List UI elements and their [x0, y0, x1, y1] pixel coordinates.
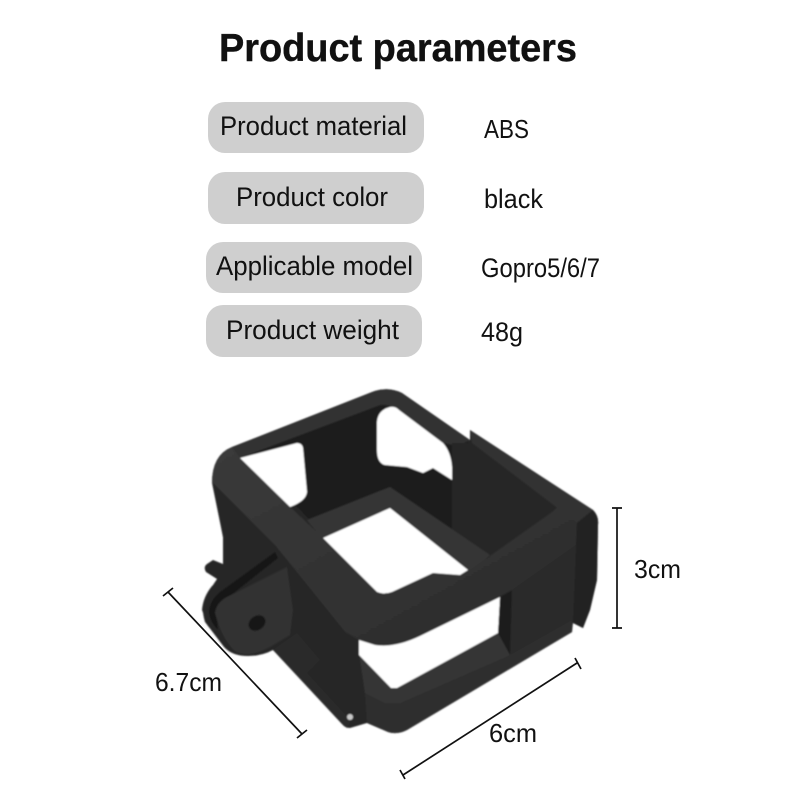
- lower frame edge: [365, 620, 572, 733]
- dimension: 3cm: 3cm: [634, 554, 681, 584]
- row: product weight: 48g: [481, 317, 523, 347]
- dimension: 6.7cm: [155, 588, 307, 738]
- lower window gasket: [359, 633, 510, 703]
- dimension: 6cm: [400, 658, 581, 779]
- centre window: [323, 508, 468, 594]
- row: product weight: [206, 305, 523, 357]
- dimension: 3cm: [612, 508, 681, 628]
- right front block: [510, 545, 576, 668]
- frame silhouette: [203, 389, 598, 733]
- row: product color: Product color: [236, 182, 388, 212]
- side rail: [470, 430, 593, 523]
- back rim band: [232, 389, 470, 458]
- row: product color: [208, 172, 543, 224]
- mount tab front plate: [215, 567, 293, 654]
- title: Product parameters: [219, 27, 577, 70]
- window side wall: [498, 590, 512, 655]
- front rim: [212, 447, 577, 648]
- parameter table: [206, 102, 600, 357]
- bottom hinge plate: [273, 633, 355, 728]
- row: product weight: Product weight: [226, 315, 399, 345]
- dimension: 6.7cm: 6.7cm: [155, 667, 222, 697]
- row: applicable model: Gopro5/6/7: [481, 253, 600, 283]
- mounting hole: [246, 612, 268, 634]
- dimension: 6cm: 6cm: [489, 718, 537, 748]
- row: product color: black: [484, 184, 543, 214]
- mount tab groove: [209, 552, 278, 630]
- row: product material: [208, 102, 529, 153]
- row: applicable model: Applicable model: [216, 251, 413, 281]
- right wall panel: [452, 443, 558, 558]
- side wall: [213, 483, 368, 723]
- row: product material: ABS: [484, 114, 529, 144]
- lower window: [359, 597, 500, 688]
- row: product material: Product material: [220, 111, 407, 141]
- row: applicable model: [206, 242, 600, 293]
- upper left window: [240, 443, 307, 507]
- product image: camera frame: [202, 389, 598, 733]
- upper right window: [377, 407, 452, 480]
- gasket: [307, 487, 490, 600]
- hinge pin: [307, 664, 360, 722]
- interior wall: [240, 403, 560, 596]
- right end cap: [573, 510, 598, 628]
- mount tab back plate: [202, 545, 276, 640]
